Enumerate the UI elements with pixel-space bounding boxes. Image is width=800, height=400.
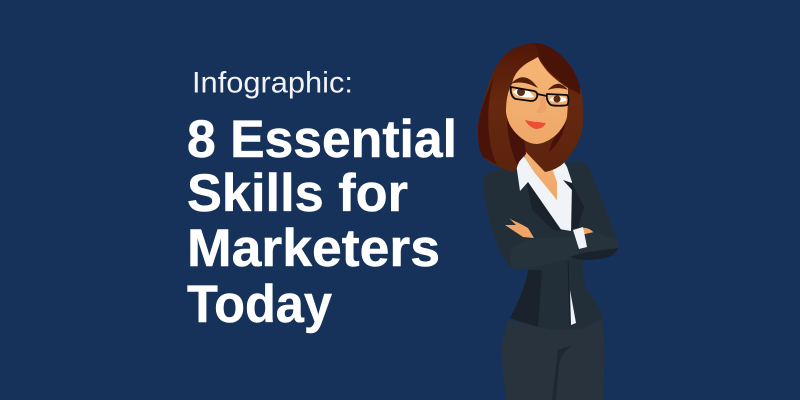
glasses [511,87,568,106]
forearm front [511,232,618,270]
hair dark shadow left [478,76,497,165]
lips [525,120,546,129]
lapel right [563,180,584,229]
nose [536,97,546,113]
title: 8 Essential [187,110,457,169]
eyebrow right [548,84,568,90]
hair dark inner right [549,115,567,152]
eye left [513,89,534,97]
hair dark inner left [507,115,526,164]
title: Skills for [187,164,408,223]
shirt sliver [570,290,576,325]
lapel left [527,182,562,231]
hand left [505,218,534,238]
jacket centre line [568,258,570,324]
hair back [478,43,583,172]
eye right [549,96,567,102]
hand right [579,228,594,238]
arm shadow [570,248,618,260]
eyebrow left [511,77,538,88]
subtitle: Infographic: [192,66,353,100]
title: Today [187,275,332,334]
trouser crease [552,345,572,400]
illustration: businesswoman [478,43,618,400]
neck and chest [523,130,560,200]
jacket shoulders and arms [483,162,618,268]
title [187,110,457,334]
trousers [502,318,604,400]
title: Marketers [187,219,440,278]
face [506,57,568,144]
shirt cuff [573,227,587,249]
jacket dark side panel [510,270,542,327]
jacket body [510,200,603,330]
hair crown dark [535,43,580,95]
shirt collar and placket [515,152,572,231]
